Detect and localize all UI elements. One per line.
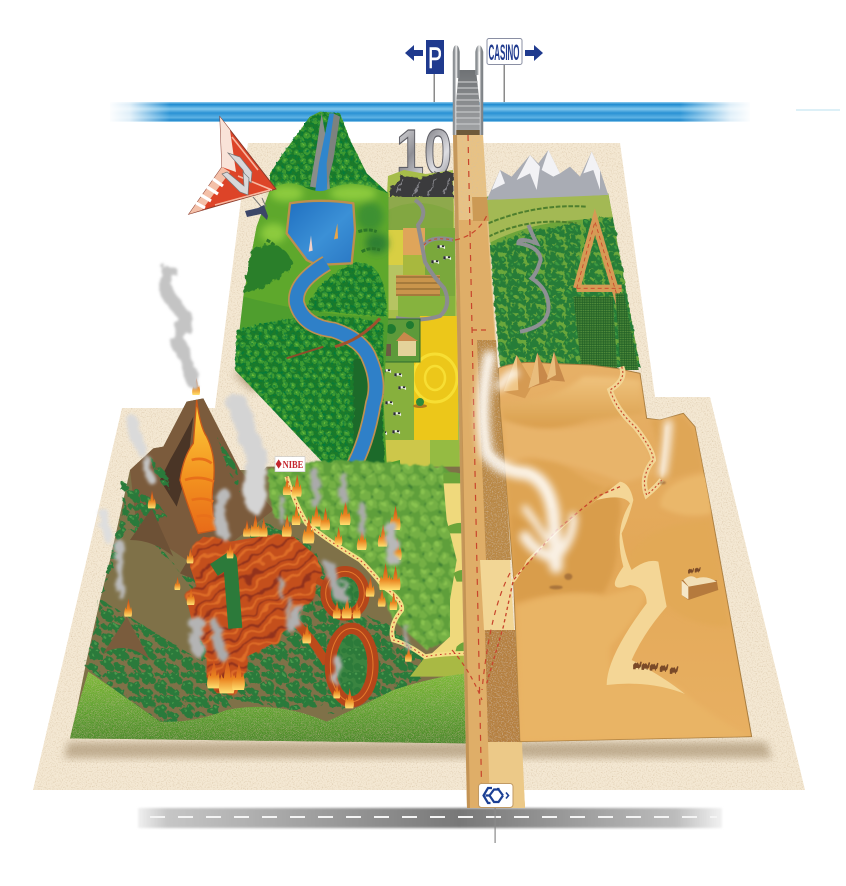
parking sign: P (428, 42, 442, 75)
mountain slope (130, 398, 273, 560)
sand craters (549, 481, 666, 589)
river (296, 263, 376, 470)
forest clumps (97, 507, 393, 710)
winding trail (610, 367, 662, 495)
hang glider (189, 117, 276, 220)
rail station sign (478, 784, 513, 843)
sand road (487, 482, 685, 694)
pyramids (503, 352, 565, 398)
desert terrain (483, 352, 752, 742)
smoke clouds (103, 403, 407, 680)
dunes (500, 377, 750, 742)
volcano smoke plume (166, 272, 192, 380)
light forest (267, 460, 460, 650)
casino sign (487, 38, 543, 102)
forest number 1 (214, 559, 235, 628)
water band (108, 100, 840, 124)
pilot (245, 205, 268, 220)
escalator (453, 47, 483, 135)
casino sign: CASINO (488, 40, 520, 65)
pale field strip (430, 480, 467, 655)
white dust plumes (483, 357, 668, 567)
camels (633, 567, 701, 674)
sand base plate (33, 143, 805, 790)
snowy mountains (487, 150, 608, 200)
waterfall (314, 113, 334, 200)
lava lake (187, 537, 322, 693)
black rock mound (389, 172, 453, 198)
dashed route line (468, 135, 482, 808)
smaller cones (103, 508, 203, 660)
textured patches (477, 340, 511, 560)
upper left terrain with waterfall and lake (235, 112, 400, 470)
silver number 10: 10 (396, 116, 452, 188)
sailboats (309, 223, 338, 252)
NIBE sign (275, 457, 305, 472)
lake (287, 201, 355, 265)
NIBE sign: NIBE (283, 460, 304, 471)
bridge (335, 318, 380, 347)
hill shading (261, 185, 388, 253)
vineyard (573, 297, 617, 370)
cows (379, 245, 451, 435)
tree lines (267, 230, 380, 257)
bottom road (138, 808, 722, 828)
foreground grass (70, 672, 467, 743)
lava flow (180, 400, 217, 533)
letter shaped path (577, 222, 635, 367)
flames (124, 377, 412, 708)
tractor (413, 398, 427, 408)
parking sign (405, 40, 444, 102)
central sand strip (452, 135, 525, 808)
green hills (243, 183, 388, 317)
number 3 road (518, 225, 548, 332)
lower left terrain with volcano and forest (70, 377, 468, 743)
farm (382, 319, 420, 362)
upper right terrain with mountains, road and vineyard (487, 150, 640, 370)
lava number 8 (295, 571, 373, 702)
dotted yellow trail (287, 477, 465, 657)
rock outcrop (682, 576, 718, 600)
upper middle farmland (378, 170, 460, 470)
forested mountain (270, 112, 388, 200)
